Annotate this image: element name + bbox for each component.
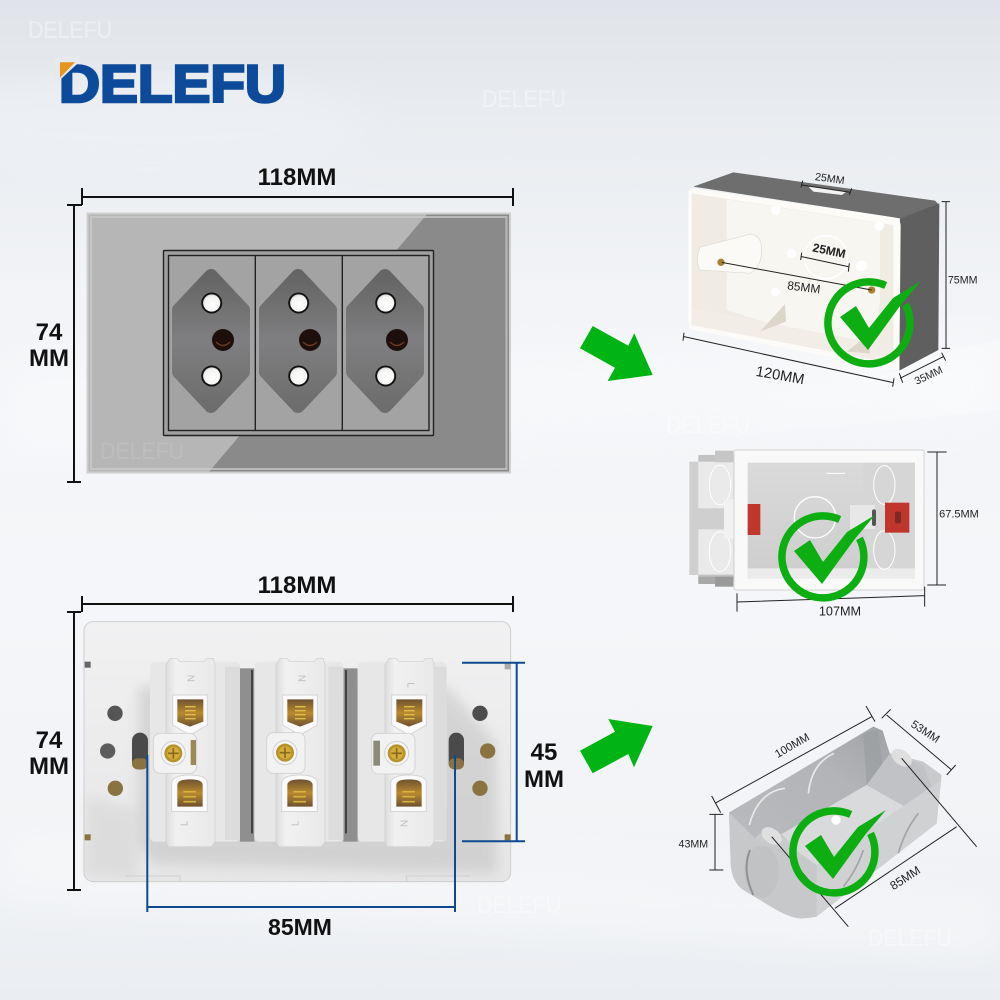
dimension: bottom width 118MM xyxy=(82,572,513,612)
dimension: top width 118MM: 118MM xyxy=(258,164,336,191)
dimension labels: 53MM xyxy=(908,719,941,746)
socket frame xyxy=(164,250,434,436)
watermarks: DELEFU xyxy=(868,925,952,952)
module 3: L xyxy=(404,682,415,688)
socket 2 xyxy=(266,276,330,406)
arrow: down right xyxy=(580,326,653,381)
dimension lines xyxy=(737,452,947,612)
module 2: L xyxy=(290,820,301,826)
dimension: bottom height 74MM: 74 xyxy=(36,727,63,754)
mounting holes xyxy=(85,662,511,840)
module 1 xyxy=(150,658,240,847)
watermarks: DELEFU xyxy=(28,17,112,44)
module 1: N xyxy=(184,675,195,682)
watermarks: DELEFU xyxy=(666,412,750,439)
dimension: top height 74MM: 74 xyxy=(36,319,63,346)
module 3: N xyxy=(399,820,410,827)
dimension lines xyxy=(683,181,950,387)
check mark: flush box xyxy=(782,515,875,598)
module 2: N xyxy=(295,675,306,682)
dimension labels: 35MM xyxy=(913,364,945,388)
dimension lines xyxy=(709,706,977,927)
box body xyxy=(688,172,939,371)
dimension labels xyxy=(679,719,941,893)
watermarks: DELEFU xyxy=(477,892,561,919)
socket 3 xyxy=(353,276,417,406)
module 1: L xyxy=(179,820,190,826)
dimension labels: 75MM xyxy=(948,275,977,287)
dimension: top width 118MM xyxy=(82,164,513,206)
watermark on plate: DELEFU xyxy=(100,438,184,465)
watermarks: DELEFU xyxy=(482,86,566,113)
panel: white surface box 120mm xyxy=(683,171,977,388)
dimension labels: 85MM xyxy=(887,863,923,893)
dimension: bottom height 74MM: MM xyxy=(29,753,69,780)
dimension labels: 100MM xyxy=(773,731,812,761)
dimension: spacing 85MM: 85MM xyxy=(268,914,332,940)
box body xyxy=(729,727,942,918)
arrow: up right xyxy=(580,719,653,773)
dimension labels: 25MM xyxy=(814,171,845,187)
dimension: bottom height 74MM xyxy=(29,612,81,890)
dimension: spacing 85MM xyxy=(147,755,455,940)
dimension: top height 74MM: MM xyxy=(29,345,69,372)
panel: metal box xyxy=(679,706,977,927)
socket 1 xyxy=(179,276,243,406)
dimension labels: 85MM xyxy=(786,278,821,296)
module 2 xyxy=(254,658,343,847)
logo: DELEFU: DELEFU xyxy=(59,55,286,114)
dimension: bottom width 118MM: 118MM xyxy=(258,572,336,599)
dimension: height 45MM: 45 xyxy=(531,739,557,766)
box body xyxy=(689,450,924,590)
module 3 xyxy=(358,658,447,847)
panel: socket back plate xyxy=(84,622,511,882)
dimension labels xyxy=(819,508,979,618)
plate xyxy=(84,622,511,882)
dimension: height 45MM: MM xyxy=(524,766,564,793)
dimension labels: 43MM xyxy=(679,839,708,851)
dimension labels: 120MM xyxy=(755,364,805,388)
dimension labels: 107MM xyxy=(819,604,861,618)
check mark: metal box xyxy=(793,810,886,893)
dimension labels: 25MM xyxy=(811,240,847,261)
dimension: top height 74MM xyxy=(29,205,82,482)
gaps between modules xyxy=(240,668,358,842)
dimension labels xyxy=(755,171,977,388)
dimension labels: 67.5MM xyxy=(939,508,979,520)
panel: white flush box 107mm xyxy=(689,450,979,618)
panel: socket front glass plate xyxy=(86,212,511,474)
red terminals xyxy=(748,503,909,535)
dimension: height 45MM xyxy=(462,663,564,841)
check mark: white box xyxy=(828,281,921,364)
